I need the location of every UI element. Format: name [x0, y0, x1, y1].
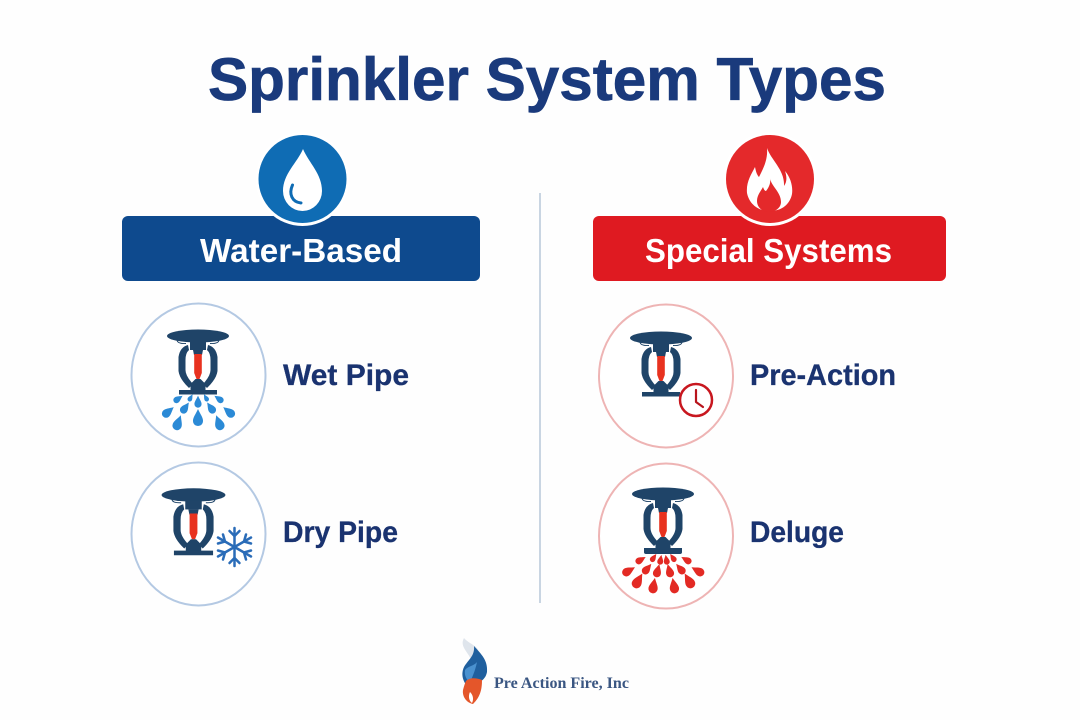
item: pre-action: [599, 304, 896, 448]
label: wet pipe: Wet Pipe: [283, 359, 409, 392]
title: Sprinkler System Types: [208, 46, 886, 113]
column divider: [539, 193, 541, 603]
header bar: special systems: [593, 216, 946, 281]
item: dry pipe: [132, 462, 398, 606]
logo text: Pre Action Fire, Inc: [494, 675, 629, 692]
icon: flame: [723, 132, 817, 226]
label: dry pipe: Dry Pipe: [283, 516, 398, 549]
footer logo: [462, 638, 629, 704]
label: pre-action: Pre-Action: [750, 359, 896, 392]
icon: water drop: [256, 132, 350, 226]
circle: pre-action: [599, 304, 733, 448]
label: deluge: Deluge: [750, 516, 844, 549]
panel: special systems header: [593, 132, 946, 281]
header bar: special systems: Special Systems: [645, 232, 892, 269]
icon: logo flame: [462, 638, 487, 704]
header bar: water-based: [122, 216, 480, 281]
header bar: water-based: Water-Based: [200, 232, 402, 269]
icon: sprinkler with snowflake: [162, 488, 251, 566]
icon: sprinkler with water spray: [160, 330, 237, 432]
circle: wet pipe: [132, 304, 266, 446]
icon: sprinkler with red spray: [621, 488, 706, 594]
circle: deluge: [599, 464, 733, 608]
item: wet pipe: [132, 304, 409, 446]
item: deluge: [599, 464, 844, 608]
icon: sprinkler with clock: [630, 332, 712, 416]
panel: water-based header: [122, 132, 480, 281]
circle: dry pipe: [132, 462, 266, 606]
